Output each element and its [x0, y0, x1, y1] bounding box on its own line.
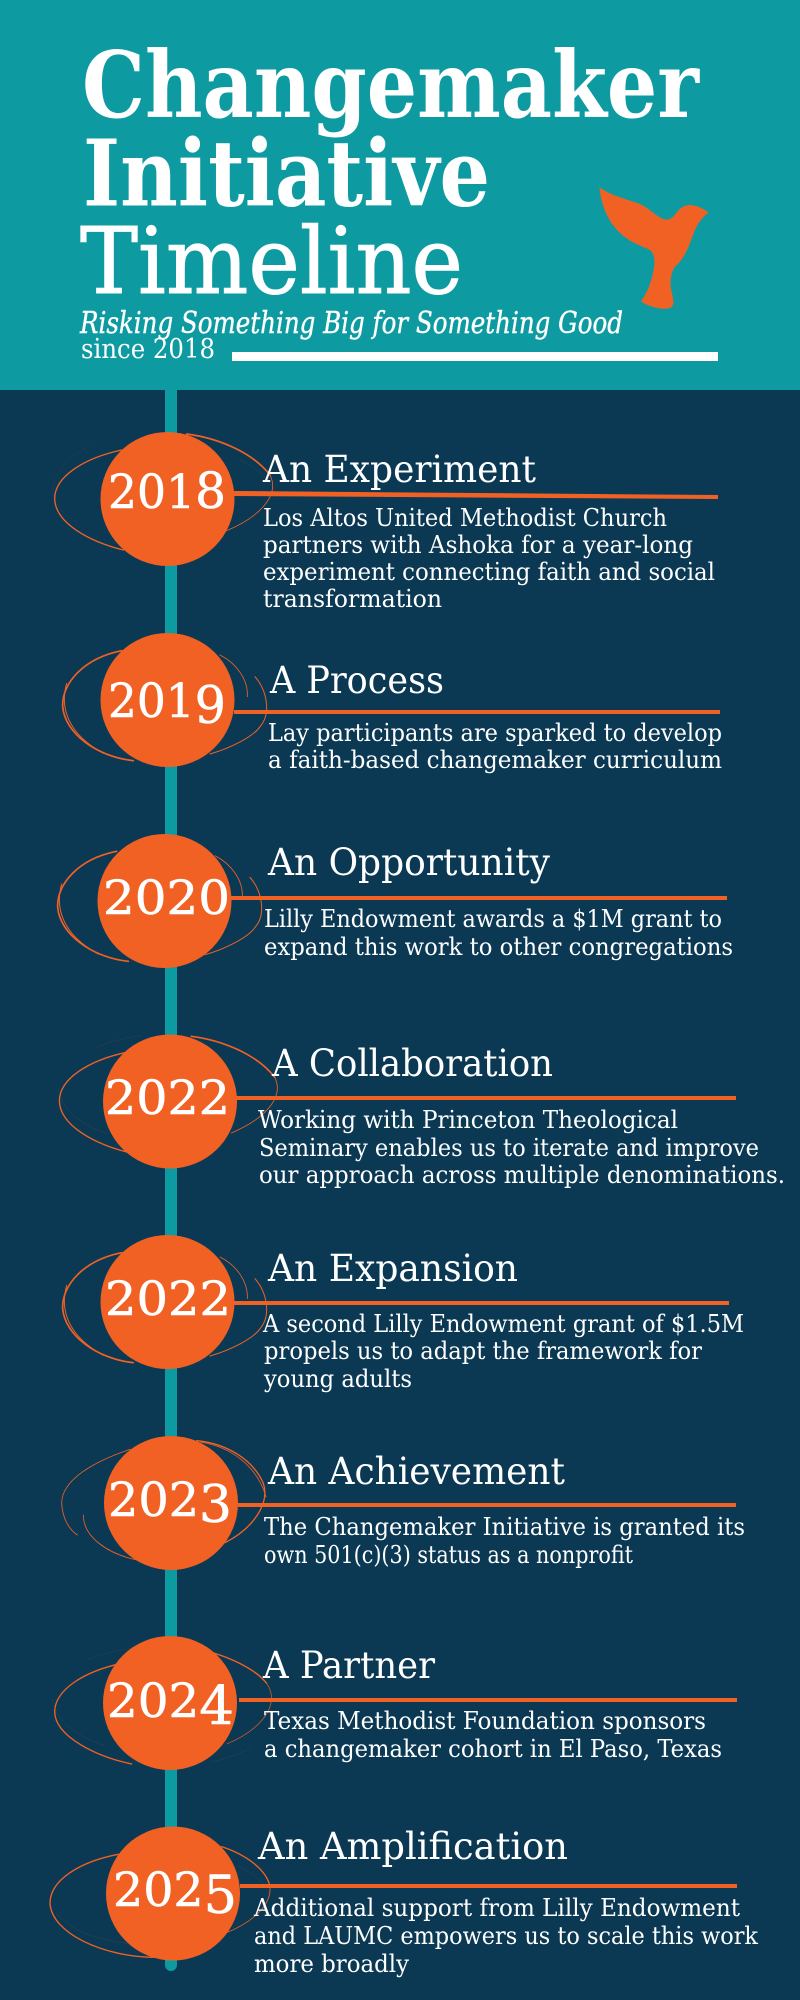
description	[264, 1513, 745, 1569]
connector line	[240, 1884, 737, 1888]
description: Seminary enables us to iterate and improve	[259, 1134, 759, 1162]
milestone: 2019 A Process	[63, 633, 722, 774]
year badge	[106, 1826, 240, 1960]
scribble ring 2025	[50, 1847, 270, 1957]
description	[253, 1894, 758, 1978]
description: expand this work to other congregations	[264, 933, 733, 961]
connector line	[234, 491, 718, 499]
milestone: 2020 An Opportunity	[58, 834, 733, 968]
milestone: 2023 An Achievement	[62, 1436, 745, 1570]
description: young adults	[263, 1365, 412, 1393]
description: Texas Methodist Foundation sponsors	[264, 1707, 706, 1735]
scribble ring 2022 second	[63, 1253, 267, 1363]
year badge: 4	[199, 1676, 234, 1737]
connector line	[234, 710, 720, 714]
description: Lay participants are sparked to develop	[268, 719, 722, 747]
milestone: 2018 An Experiment	[53, 432, 718, 613]
since 2018 label: since 2018	[81, 334, 215, 365]
scribble ring 2020	[58, 851, 262, 961]
scribble ring 2018	[53, 434, 277, 550]
description: our approach across multiple denominations.	[259, 1161, 785, 1189]
milestone: 2024 A Partner	[53, 1636, 737, 1770]
year badge	[104, 1436, 238, 1570]
heading: A Collaboration	[271, 1042, 553, 1085]
description	[262, 1310, 744, 1393]
heading: An Opportunity	[267, 841, 550, 884]
description: and LAUMC empowers us to scale this work	[254, 1922, 758, 1950]
description: experiment connecting faith and social	[263, 558, 715, 586]
description: The Changemaker Initiative is granted its	[264, 1513, 745, 1541]
description: Los Altos United Methodist Church	[263, 504, 667, 532]
scribble ring 2022 first	[58, 1036, 277, 1152]
year badge	[103, 1034, 237, 1168]
description: Working with Princeton Theological	[258, 1106, 678, 1134]
description	[258, 1106, 785, 1189]
description: propels us to adapt the framework for	[264, 1337, 702, 1365]
year badge: 5	[204, 1866, 237, 1926]
timeline spine	[165, 390, 177, 1971]
connector line	[239, 1698, 737, 1702]
year badge: 9	[195, 677, 226, 736]
year badge: 2020	[103, 871, 230, 926]
year badge: 201	[108, 674, 198, 729]
year badge: 202	[107, 1674, 197, 1729]
description: more broadly	[254, 1950, 409, 1978]
header panel	[0, 0, 800, 390]
description	[268, 719, 722, 774]
description: partners with Ashoka for a year-long	[263, 531, 693, 559]
description	[263, 504, 715, 613]
heading: An Expansion	[267, 1247, 518, 1290]
heading: A Partner	[262, 1644, 435, 1687]
heading: An Amplification	[257, 1825, 568, 1868]
heading: A Process	[269, 659, 444, 702]
tagline: Risking Something Big for Something Good	[79, 306, 623, 341]
year badge: 3	[199, 1476, 232, 1535]
scribble ring 2024	[53, 1647, 272, 1764]
description: Lilly Endowment awards a $1M grant to	[264, 905, 722, 933]
icon: orange dove	[599, 187, 709, 309]
heading: An Achievement	[267, 1450, 565, 1493]
description	[264, 905, 733, 961]
title line: Initiative: Initiative	[83, 120, 490, 228]
milestone: 2022 A Collaboration	[58, 1034, 785, 1189]
scribble ring 2019	[63, 651, 267, 761]
description: own 501(c)(3) status as a nonprofit	[264, 1541, 633, 1569]
year badge	[100, 633, 234, 767]
connector line	[231, 896, 727, 900]
connector line	[234, 1301, 729, 1305]
connector line	[238, 1503, 736, 1507]
description: transformation	[263, 585, 442, 613]
year badge	[100, 1235, 234, 1369]
title line: Changemaker: Changemaker	[82, 31, 700, 139]
heading: An Experiment	[262, 448, 536, 491]
description: A second Lilly Endowment grant of $1.5M	[262, 1310, 744, 1338]
description: a changemaker cohort in El Paso, Texas	[264, 1735, 722, 1763]
description: a faith-based changemaker curriculum	[268, 746, 722, 774]
description	[264, 1707, 722, 1763]
year badge: 2018	[108, 462, 226, 520]
scribble ring 2023	[62, 1441, 266, 1560]
year badge: 202	[113, 1863, 203, 1918]
year badge: 2022	[105, 1272, 231, 1327]
title line: Timeline: Timeline	[80, 208, 463, 315]
year badge: 2022	[105, 1071, 230, 1126]
header white bar	[232, 352, 718, 361]
year badge	[100, 432, 234, 566]
year badge	[103, 1636, 237, 1770]
connector line	[236, 1096, 736, 1100]
milestone: 2025 An Amplification	[50, 1825, 758, 1978]
description: Additional support from Lilly Endowment	[253, 1894, 740, 1922]
milestone: 2022 An Expansion	[63, 1235, 744, 1393]
year badge	[98, 834, 232, 968]
year badge: 202	[108, 1473, 198, 1528]
